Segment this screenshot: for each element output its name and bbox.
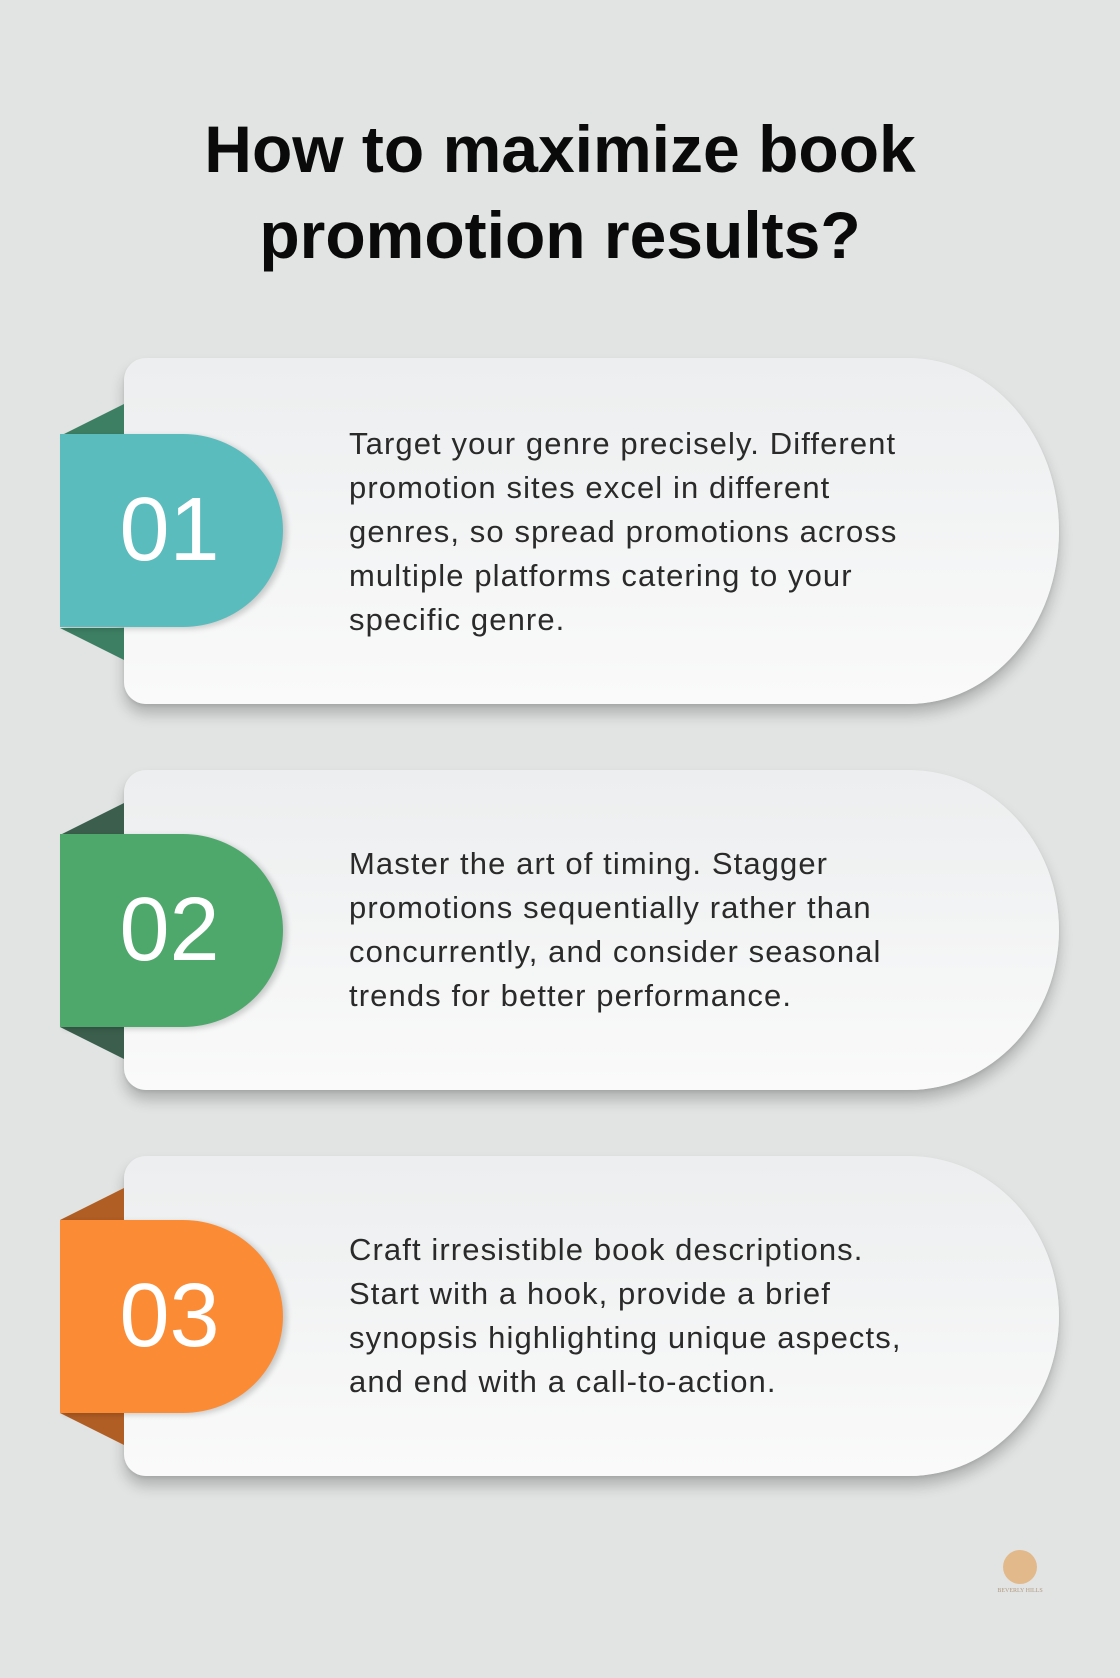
text 02: trends for better performance. [349, 978, 792, 1013]
text 01 [349, 426, 898, 637]
badge 03: 03 [119, 1266, 220, 1366]
text 01: promotion sites excel in different [349, 470, 830, 505]
text 03: Start with a hook, provide a brief [349, 1276, 831, 1311]
logo text: BEVERLY HILLS [997, 1588, 1043, 1594]
title [204, 112, 916, 272]
card 01 [124, 358, 1059, 704]
panel: step 02 [60, 770, 1066, 1107]
text 02: Master the art of timing. Stagger [349, 846, 828, 881]
text 01: specific genre. [349, 602, 565, 637]
panel: step 01 [60, 358, 1066, 721]
card 03 [124, 1156, 1059, 1476]
title: promotion results? [259, 198, 861, 272]
text 02: concurrently, and consider seasonal [349, 934, 882, 969]
fold bottom 02 [60, 1027, 124, 1059]
fold bottom 03 [60, 1413, 124, 1445]
badge 03 [60, 1220, 283, 1413]
logo [997, 1550, 1043, 1594]
text 03: synopsis highlighting unique aspects, [349, 1320, 902, 1355]
badge 02 [60, 834, 283, 1027]
badge 02: 02 [119, 880, 220, 980]
card 02 [124, 770, 1059, 1090]
panel: step 03 [60, 1156, 1066, 1493]
icon: logo medallion [1003, 1550, 1037, 1584]
text 01: multiple platforms catering to your [349, 558, 853, 593]
fold top 02 [62, 803, 124, 834]
fold top 03 [60, 1188, 124, 1220]
text 02: promotions sequentially rather than [349, 890, 872, 925]
text 01: Target your genre precisely. Different [349, 426, 896, 461]
fold top 01 [64, 404, 124, 434]
fold bottom 01 [60, 628, 124, 660]
text 02 [349, 846, 882, 1013]
badge 01: 01 [119, 480, 220, 580]
badge 01 [60, 434, 283, 627]
text 03: Craft irresistible book descriptions. [349, 1232, 864, 1267]
text 03: and end with a call-to-action. [349, 1364, 777, 1399]
text 03 [349, 1232, 902, 1399]
title: How to maximize book [204, 112, 916, 186]
text 01: genres, so spread promotions across [349, 514, 898, 549]
